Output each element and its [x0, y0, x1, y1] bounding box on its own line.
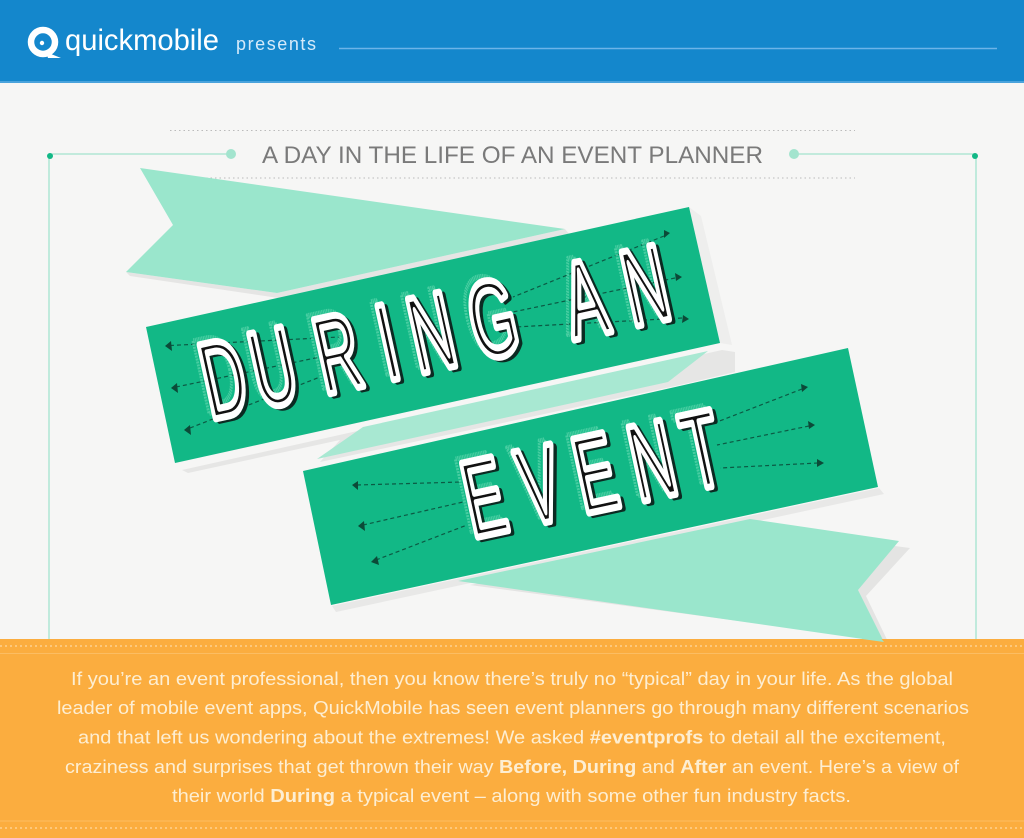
title lettering: event: EVENT	[456, 390, 736, 563]
arrows: left side, top banner	[165, 337, 340, 435]
banner: during an	[146, 207, 720, 463]
intro paragraph	[57, 668, 969, 806]
intro paragraph: their world During a typical event – along with some other fun industry facts.	[172, 785, 851, 806]
subtitle with dotted rules: A DAY IN THE LIFE OF AN EVENT PLANNER	[262, 142, 763, 169]
logo wordmark: quickmobile	[65, 24, 219, 57]
title lettering: event: EVENT	[452, 388, 732, 561]
icon: quickmobile logo	[31, 30, 61, 58]
header bar	[0, 0, 1024, 83]
ribbon tail: top left	[126, 168, 570, 299]
intro paragraph: If you’re an event professional, then you know there’s truly no “typical” day in your life. As the global	[71, 668, 953, 689]
ribbon fold: middle	[182, 207, 735, 473]
arrows: left side, lower banner	[352, 481, 467, 565]
title lettering: event: EVENT	[452, 388, 732, 561]
title lettering: during an: DURING AN	[172, 218, 673, 440]
title lettering: event: EVENT	[446, 383, 726, 556]
title lettering: during an: DURING AN	[178, 223, 679, 445]
presents label: presents	[236, 34, 316, 54]
arrows: right side, lower banner	[717, 384, 824, 468]
intro paragraph: and that left us wondering about the extremes! We asked #eventprofs to detail all the excitement,	[78, 726, 946, 748]
title lettering: during an: DURING AN	[178, 223, 679, 445]
ribbon tail: bottom right	[332, 488, 910, 650]
intro panel	[0, 639, 1024, 838]
intro paragraph: leader of mobile event apps, QuickMobile has seen event planners go through many different scenarios	[57, 697, 969, 718]
intro paragraph: craziness and surprises that get thrown their way Before, During and After an event. Here’s a view of	[65, 756, 960, 777]
ribbon tip over panel	[862, 625, 884, 642]
frame lines with end dots	[47, 149, 978, 640]
title lettering: during an: DURING AN	[182, 225, 683, 447]
banner: event	[303, 348, 878, 605]
arrows: right side, top banner	[513, 230, 689, 327]
